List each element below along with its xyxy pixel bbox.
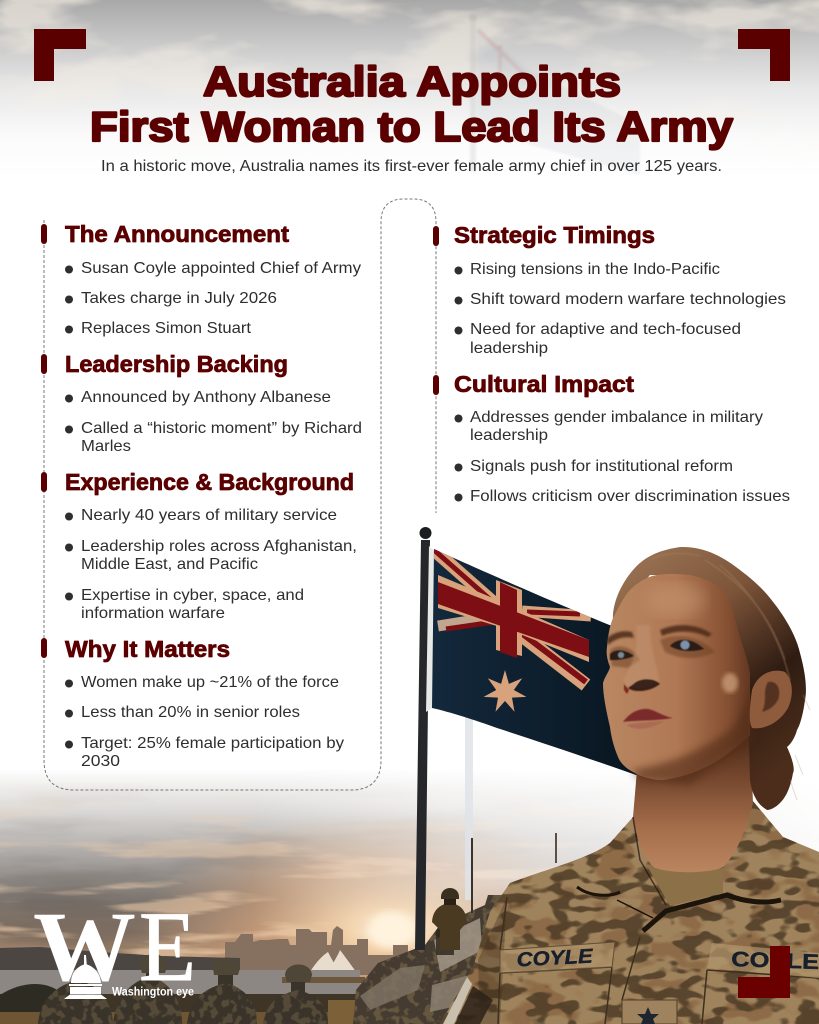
list: strategic points: Need for adaptive and tech-focused [470,321,741,338]
background: sunset sky and landscape [0,776,634,985]
illustration: name tape right: COYLE [731,948,819,974]
section: Why It Matters [41,636,344,770]
section: Leadership Backing [41,351,362,455]
illustration: hair [613,547,810,810]
background: cloudy sky top [0,0,819,136]
face: nose [624,625,660,694]
background: city skyline and opera house [0,926,408,1024]
title: Australia Appoints [203,58,621,105]
face: cheek highlight [722,673,738,693]
list: experience points: Middle East, and Pacific [81,556,258,573]
face: eye left [610,650,634,660]
heading: Leadership Backing: Leadership Backing [65,351,288,377]
face: lips [623,709,673,729]
dashed panel outline [44,199,436,790]
section: Experience & Background [41,469,357,622]
illustration: far flagpole and antennas [465,700,557,913]
list: why it matters points: 2030 [81,753,120,770]
list: strategic points: Rising tensions in the Indo-Pacific [470,261,720,278]
heading: Cultural Impact: Cultural Impact [454,371,634,397]
face: forehead glow [645,584,705,616]
background: ghost flag at top [469,14,640,175]
list: experience points: Expertise in cyber, space, and [81,587,304,604]
list: announcement points [65,260,361,337]
list: announcement points: Susan Coyle appointed Chief of Army [81,260,361,277]
face: jaw shadow [632,690,752,785]
list: announcement points: Takes charge in July 2026 [81,290,277,307]
list: cultural points: Addresses gender imbalance in military [470,409,763,426]
heading: Experience & Background: Experience & Background [65,469,354,495]
list: cultural points: leadership [470,427,548,444]
list: strategic points [454,261,786,357]
face: ear [750,671,792,728]
list: why it matters points [65,674,344,770]
heading: The Announcement: The Announcement [65,221,289,247]
section: Cultural Impact [433,371,790,505]
corner bracket: top right [738,29,790,81]
face: inner ear [762,682,779,712]
illustration: name tape left: COYLE [516,946,594,971]
list: experience points: information warfare [81,605,225,622]
list: why it matters points: Target: 25% female participation by [81,735,344,752]
logo: Washington eye: W [33,891,136,1002]
heading: Strategic Timings: Strategic Timings [454,222,655,248]
list: leadership points: Announced by Anthony Albanese [81,389,331,406]
face: eye right [670,640,704,651]
heading: Why It Matters: Why It Matters [65,636,230,662]
corner bracket: bottom right [738,946,790,998]
list: strategic points: Shift toward modern warfare technologies [470,291,786,308]
illustration: neck and undershirt [633,730,753,906]
illustration: rank patch [622,1000,677,1024]
illustration: soldier on vehicle [432,888,467,950]
illustration: face [603,574,792,785]
illustration: Australian flag with pole [415,527,655,950]
list: strategic points: leadership [470,340,548,357]
subtitle: In a historic move, Australia names its first-ever female army chief in over 125 years. [101,158,722,175]
section: The Announcement [41,221,361,337]
illustration: name tape right [707,943,819,978]
illustration: uniform with camouflage [436,795,819,1024]
logo: Washington eye: Washington eye [112,986,194,998]
logo: Washington eye [33,891,196,1002]
illustration: name tape left [500,942,615,973]
title: First Woman to Lead Its Army [90,103,734,150]
list: experience points: Leadership roles across Afghanistan, [81,538,357,555]
illustration: foreground soldiers [30,954,340,1024]
icon: capitol dome [64,955,107,999]
list: cultural points: Signals push for institutional reform [470,458,733,475]
list: announcement points: Replaces Simon Stuart [81,320,252,337]
list: experience points: Nearly 40 years of military service [81,507,337,524]
title [90,58,734,150]
list: leadership points [65,389,362,455]
list: why it matters points: Women make up ~21% of the force [81,674,339,691]
list: leadership points: Called a “historic moment” by Richard [81,420,362,437]
corner bracket: top left [34,29,86,81]
list: why it matters points: Less than 20% in senior roles [81,704,300,721]
section: Strategic Timings [433,222,786,357]
face: brows and sockets [607,625,715,668]
illustration: collar shadows [577,817,781,931]
illustration: armoured vehicle [353,895,502,1024]
list: leadership points: Marles [81,438,131,455]
logo: Washington eye: E [139,891,196,1002]
list: cultural points [454,409,790,505]
list: cultural points: Follows criticism over discrimination issues [470,488,790,505]
list: experience points [65,507,357,622]
